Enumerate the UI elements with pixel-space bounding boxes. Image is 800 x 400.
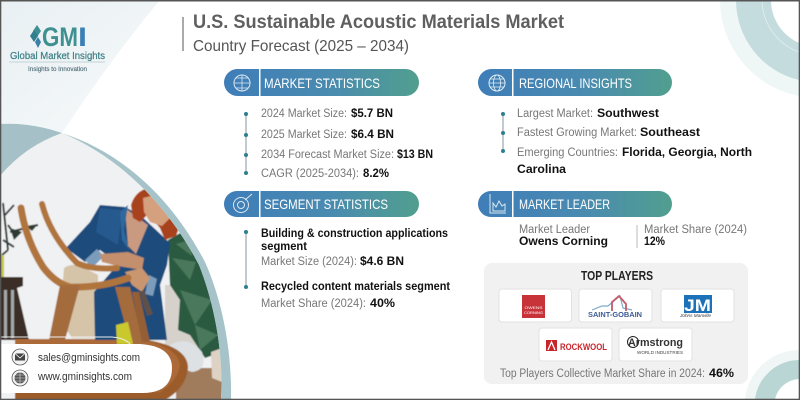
top players heading: TOP PLAYERS <box>581 269 653 283</box>
icon: website globe <box>12 370 28 386</box>
segment: building and construction: $4.6 BN <box>360 254 404 268</box>
decorative top-left background shape <box>0 0 160 133</box>
logo: Johns Manville: JM <box>684 296 711 315</box>
logo: Rockwool: ROCKWOOL <box>560 342 607 352</box>
GMI logo: Insights to Innovation <box>28 66 87 73</box>
jacket <box>66 205 170 340</box>
white cushion <box>170 341 204 372</box>
region: emerging countries: Emerging Countries: <box>517 147 618 159</box>
regional insights header: REGIONAL INSIGHTS <box>519 75 632 91</box>
leader name: Owens Corning <box>519 234 608 248</box>
face <box>143 194 172 226</box>
region: fastest growing market <box>517 125 700 139</box>
decorative bottom-right ring <box>745 350 799 399</box>
segment: recycled content <box>261 279 450 310</box>
collective market share: Top Players Collective Market Share in 2024: <box>500 368 705 380</box>
segment: recycled content: Recycled content materials segment <box>261 279 450 293</box>
chair back rail 1 <box>21 208 128 287</box>
right plant <box>168 232 222 358</box>
decorative top-right ring <box>720 0 799 96</box>
leader share: Market Share (2024) <box>644 224 747 236</box>
logo: Saint-Gobain: SAINT-GOBAIN <box>588 312 642 319</box>
stat: CAGR <box>261 166 389 180</box>
stat: 2024 market size: 2024 Market Size: <box>261 108 347 120</box>
panel: top players <box>484 263 748 384</box>
stat: 2034 forecast market size: $13 BN <box>397 147 433 161</box>
table <box>15 339 188 400</box>
segment: recycled content: Market Share (2024): <box>261 298 366 310</box>
segment: building and construction: Building & construction applications <box>261 226 448 240</box>
regional insights header <box>478 69 672 96</box>
segment statistics header <box>224 191 419 217</box>
segment timeline <box>244 230 248 289</box>
region: emerging countries <box>517 145 752 176</box>
region: emerging countries: Florida, Georgia, North <box>622 145 752 159</box>
stool <box>0 277 29 340</box>
yellow candle <box>116 322 133 344</box>
segment: recycled content: 40% <box>370 296 395 310</box>
stat: 2025 market size <box>261 127 394 141</box>
chair back rail 2 <box>42 204 117 268</box>
icon: email <box>12 349 28 365</box>
panel: segment statistics <box>224 191 450 310</box>
sleeve cuffs <box>84 248 102 266</box>
region: fastest growing market: Southeast <box>640 125 700 139</box>
logo: Armstrong: WORLD INDUSTRIES <box>637 350 683 355</box>
cloth <box>60 265 98 338</box>
market statistics header: MARKET STATISTICS <box>264 75 380 91</box>
GMI logo: I <box>78 22 87 52</box>
logo: Saint-Gobain <box>579 289 652 322</box>
teal arc around photo <box>62 133 231 399</box>
market leader header <box>478 191 672 217</box>
photo: woman restoring a wooden chair <box>0 120 232 400</box>
stat: 2034 forecast market size: 2034 Forecast Market Size: <box>261 149 394 161</box>
title block <box>182 12 565 55</box>
panel: regional insights <box>478 69 752 176</box>
panel: market statistics <box>224 69 433 180</box>
region: largest market: Largest Market: <box>517 108 593 120</box>
floor <box>176 368 226 400</box>
collar <box>120 205 129 250</box>
region: fastest growing market: Fastest Growing Market: <box>517 127 637 139</box>
market statistics header <box>224 69 419 96</box>
logo: Johns Manville: Johns Manville <box>679 313 712 318</box>
segment: building and construction <box>261 226 448 268</box>
contact pill <box>0 337 172 393</box>
GMI logo <box>9 22 105 73</box>
stat: 2024 market size <box>261 106 393 120</box>
teal wedge <box>0 124 62 176</box>
leader name <box>519 224 608 248</box>
region: largest market: Southwest <box>597 106 659 120</box>
title block: Country Forecast (2025 – 2034) <box>193 38 409 55</box>
logo: Armstrong: Armstrong <box>628 337 683 349</box>
GMI logo: Global Market Insights <box>10 51 105 62</box>
leader share: 12% <box>644 234 665 248</box>
logo: Johns Manville <box>661 289 734 322</box>
chair legs <box>49 285 80 340</box>
collective market share: 46% <box>709 366 734 380</box>
logo: Owens Corning: CORNING <box>524 310 543 315</box>
website address: www.gminsights.com <box>37 371 132 383</box>
email address: sales@gminsights.com <box>38 352 140 364</box>
GMI logo: GM <box>42 22 78 52</box>
region: largest market <box>517 106 659 120</box>
left plant <box>2 203 38 255</box>
stat: 2025 market size: 2025 Market Size: <box>261 129 347 141</box>
leader name: Market Leader <box>519 224 590 236</box>
hair <box>131 187 180 240</box>
back wall lower right <box>164 284 198 348</box>
logo: Owens Corning: OWENS <box>524 305 543 310</box>
stat: CAGR: CAGR (2025-2034): <box>261 168 359 180</box>
arms and hands <box>100 252 144 270</box>
segment: building and construction: Market Size (2024): <box>261 256 357 268</box>
segment: building and construction: segment <box>261 239 307 253</box>
market leader header: MARKET LEADER <box>519 196 610 212</box>
regional timeline <box>501 112 505 153</box>
statistics timeline <box>244 112 248 175</box>
basket <box>211 348 222 382</box>
stat: 2025 market size: $6.4 BN <box>351 127 394 141</box>
stat: 2024 market size: $5.7 BN <box>351 106 393 120</box>
segment statistics header: SEGMENT STATISTICS <box>264 196 388 212</box>
logo: Armstrong <box>619 328 692 361</box>
stat: CAGR: 8.2% <box>363 166 389 180</box>
logo: Rockwool <box>539 328 612 361</box>
title block: U.S. Sustainable Acoustic Materials Market <box>193 12 565 33</box>
leader share <box>644 224 747 248</box>
neck <box>125 208 148 254</box>
panel: market leader <box>478 191 747 248</box>
logo: Owens Corning <box>499 289 572 322</box>
region: emerging countries: Carolina <box>517 162 566 176</box>
